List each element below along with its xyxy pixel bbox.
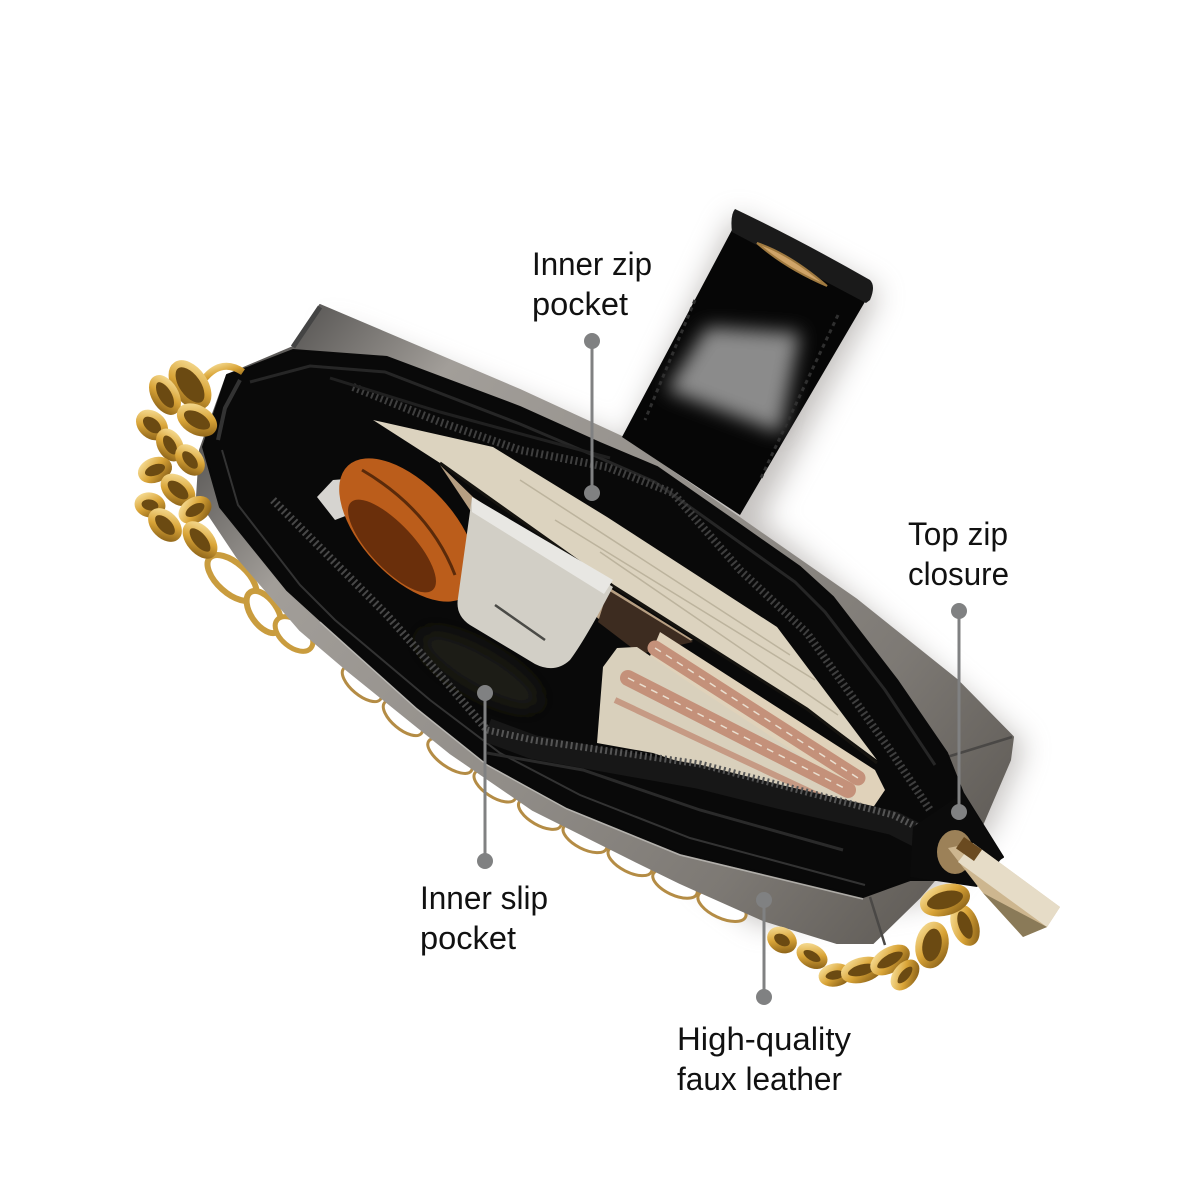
orange tin (314, 434, 502, 626)
zipper pull (937, 830, 1060, 937)
bag outer body (197, 305, 1013, 943)
zipper: inner slip pocket (273, 500, 933, 843)
zipper end (910, 793, 1003, 887)
callout: inner zip pocket: pocket (532, 286, 628, 322)
chain cluster: left (135, 357, 243, 560)
callout: inner slip pocket: pocket (420, 920, 516, 956)
body seams (293, 307, 1012, 945)
callout: inner slip pocket: Inner slip (420, 880, 548, 916)
callout: high-quality faux leather: High-quality (677, 1021, 851, 1057)
callout: inner zip pocket (532, 246, 652, 501)
callout: top zip closure (908, 516, 1009, 820)
book (373, 420, 877, 763)
wallet (597, 632, 885, 817)
velvet lining (408, 616, 552, 724)
bag interior rim (203, 350, 1003, 899)
tube (458, 497, 613, 668)
callout: inner slip pocket (420, 685, 548, 956)
callout: top zip closure: closure (908, 556, 1009, 592)
zipper: inner zip pocket (330, 378, 930, 810)
chain cluster: right (767, 883, 981, 991)
callout: inner zip pocket: Inner zip (532, 246, 652, 282)
soft shadow (320, 215, 1025, 925)
callout: high-quality faux leather (677, 892, 851, 1097)
callout: high-quality faux leather: faux leather (677, 1061, 842, 1097)
lower pocket lip (487, 753, 843, 850)
snap button (757, 243, 827, 286)
chain strap: links behind the bag lower edge (200, 547, 751, 928)
callout: top zip closure: Top zip (908, 516, 1008, 552)
strap flap (622, 209, 873, 515)
